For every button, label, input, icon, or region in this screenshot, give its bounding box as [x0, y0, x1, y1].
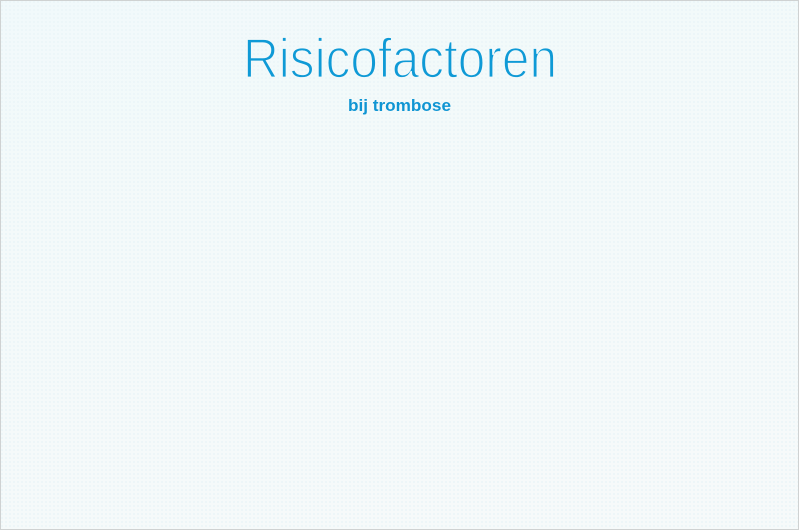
title: Risicofactoren: [243, 26, 557, 90]
subtitle: bij trombose: [348, 96, 451, 115]
